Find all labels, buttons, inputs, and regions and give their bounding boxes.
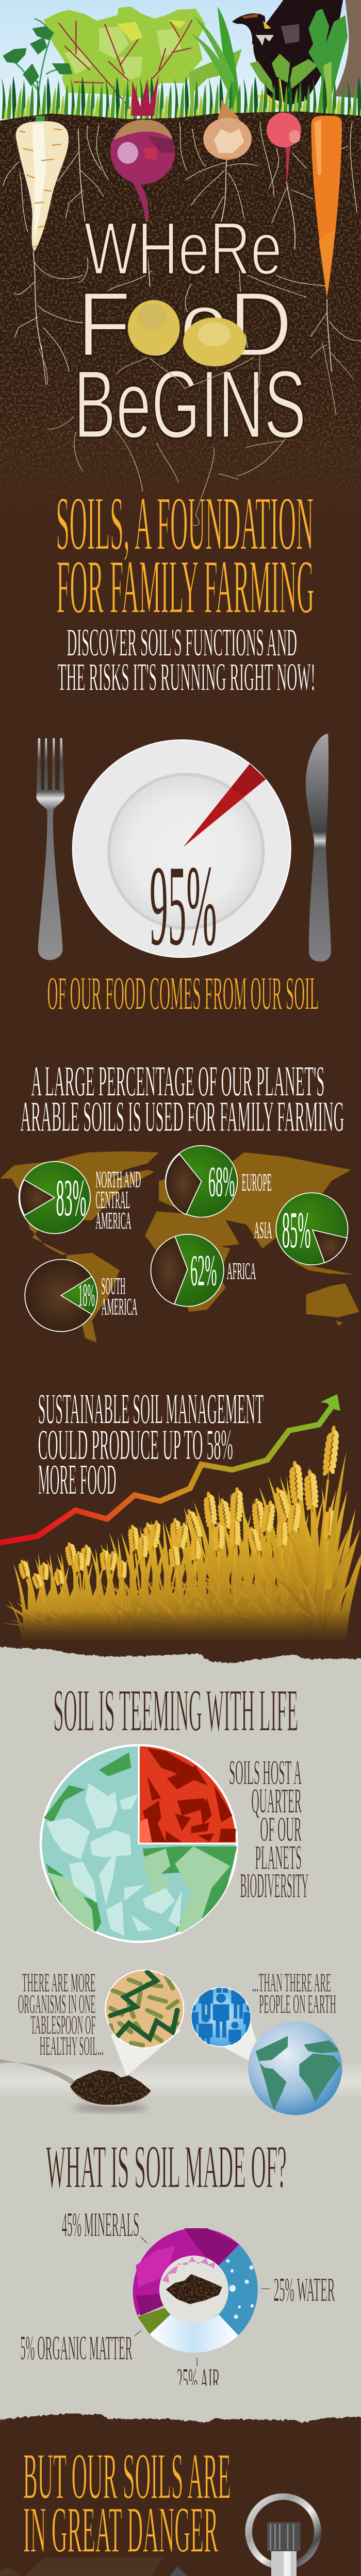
subheading [58,621,316,699]
panel: soil is teeming with life: ORGANISMS IN ONE [18,1990,95,2019]
panel: soils in danger [20,2441,361,2576]
pie: europe 68 percent [166,1146,237,1217]
icon: beet leaves [44,7,205,116]
lower roots [39,343,352,526]
leader lines [135,2237,270,2366]
region labels: SOUTH [101,1273,125,1299]
icon: radish [267,112,301,183]
icon: bacteria lens [105,1970,184,2048]
region labels [95,1167,272,1320]
panel: family farming world map: EUROPE [242,1168,272,1196]
panel: soil is teeming with life: TABLESPOON OF [30,2011,95,2040]
icon: spoon of soil [0,2059,151,2113]
icon: potatoes [128,300,246,366]
panel: family farming world map: 18% [78,1277,95,1313]
heading [23,2441,231,2566]
brown fill [0,2400,361,2576]
panel: hourglass brown background [0,2400,361,2576]
arrow: rising trend line [0,1394,340,1543]
heading [20,1057,344,1141]
grain blades [8,1465,361,1640]
icon: onion [203,99,252,160]
pie: biodiversity [41,1745,237,1942]
icon: plate [73,740,290,957]
magnifier beams [110,2019,265,2076]
region labels: AMERICA [95,1207,131,1234]
icon: beetroot [110,120,175,221]
icon: parsnip [15,116,69,251]
icon: knife [306,734,331,961]
panel: soil is teeming with life: THERE ARE MORE [22,1969,95,1997]
title: where food begins [74,207,306,458]
panel: family farming world map: 83% [56,1168,86,1227]
panel: family farming world map [0,1057,359,1343]
icon: cow [232,0,361,105]
roots [4,122,361,384]
brown upper background [0,464,361,1700]
beet stems [131,74,159,116]
text: 58 percent more food [38,1385,264,1503]
icon: parsley leaves [3,19,73,116]
animal silhouettes [46,1783,182,1936]
icon: stopwatch [160,2497,361,2576]
region labels: NORTH AND [95,1167,141,1193]
icon: fork [36,738,64,960]
light band [0,2062,361,2099]
pie: africa 62 percent [151,1234,224,1307]
land: nicaragua [0,2556,163,2576]
grain ears [0,1421,361,1647]
text: more organisms [18,1969,104,2061]
green patches [44,1752,237,1938]
panel: sustainable soil management [0,1385,361,1647]
title: where food begins: FooD [77,273,292,375]
wheat field [0,1421,361,1647]
text: soils host a quarter [229,1753,308,1905]
donut chart: soil composition [133,2228,258,2353]
icon: people lens [191,1987,251,2047]
heading: soils, a foundation [56,481,314,630]
text: 58 percent more food: MORE FOOD [38,1455,116,1503]
icon: green onion leaves [189,7,242,114]
icon: chard plant [250,54,318,109]
panel: plate 95 percent [36,734,331,1020]
panel: family farming world map: 62% [190,1246,217,1295]
panel: soil is teeming with life [18,1677,336,2076]
world map [0,1151,359,1343]
soil [0,111,361,522]
soil fade [0,426,361,522]
torn paper edge: gray above danger section [0,2385,361,2424]
region labels: CENTRAL [95,1185,130,1214]
region labels: AMERICA [101,1294,138,1320]
grass [0,76,361,119]
panel: family farming world map: ASIA [254,1217,272,1244]
icon: carrot leaves [308,9,348,114]
donut labels [20,2205,335,2399]
title: where food begins: WHeRe [84,207,282,290]
field fade [0,1611,361,1643]
panel: spoon and globe [0,2022,361,2399]
panel: soils intro [39,343,352,699]
icon: globe [248,2022,342,2115]
icon: carrot [311,116,342,298]
pie: asia 85 percent [276,1193,348,1265]
panel: hero illustration and title [0,0,361,522]
torn paper edge: gray top [0,1646,361,1737]
panel: family farming world map: AFRICA [227,1258,256,1284]
donut labels: 45% MINERALS [62,2205,139,2243]
panel: soil is teeming with life: HEALTHY SOIL... [40,2032,104,2061]
pie: north and central america 83 percent [19,1162,90,1234]
donut labels: 25% AIR [177,2361,220,2399]
text: than people [252,1969,336,2019]
pie: south america 18 percent [25,1260,97,1331]
panel: family farming world map: 68% [208,1158,235,1206]
